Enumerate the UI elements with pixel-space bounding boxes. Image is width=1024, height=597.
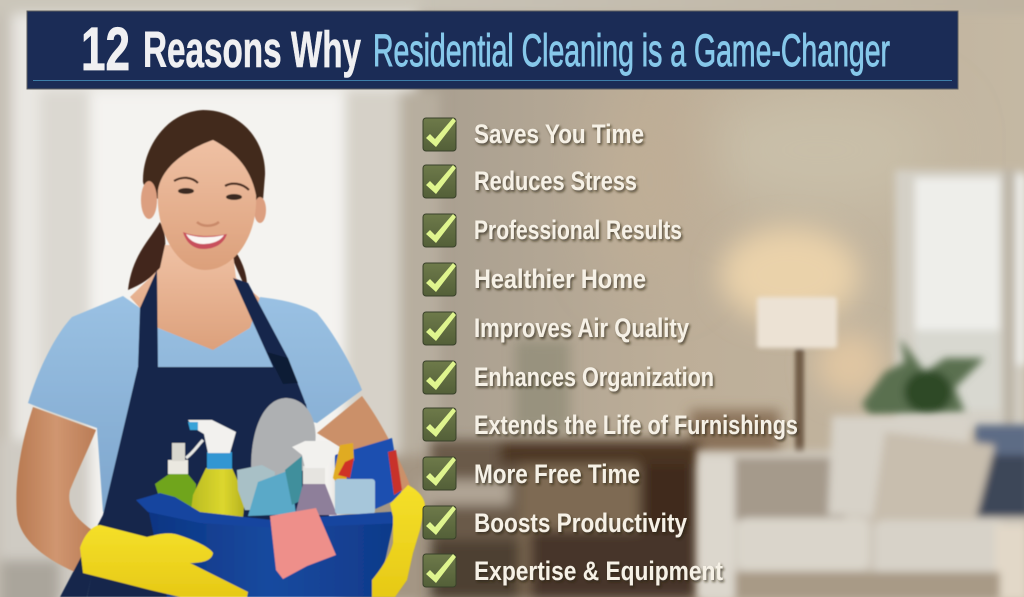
- smile: [183, 232, 227, 249]
- item: Expertise & Equipment: Expertise & Equipment: [474, 556, 723, 586]
- duster: [251, 398, 316, 480]
- item: Boosts Productivity: [423, 506, 687, 539]
- pink cloth: [270, 508, 336, 579]
- item: Reduces Stress: [423, 165, 637, 198]
- item: Improves Air Quality: [423, 312, 689, 345]
- purple spray bottle: [292, 441, 339, 515]
- arms: [16, 407, 96, 575]
- ponytail: [128, 222, 247, 290]
- sofa: [697, 416, 1024, 597]
- green bottle: [155, 443, 196, 512]
- item: Saves You Time: Saves You Time: [474, 119, 644, 149]
- ears: [141, 181, 266, 223]
- nose: [197, 222, 219, 226]
- item: Expertise & Equipment: [423, 554, 723, 587]
- lamp: [757, 297, 837, 454]
- blue caddy box: [335, 438, 402, 509]
- wall glow and top strip: [0, 0, 1024, 397]
- window: [895, 170, 1024, 430]
- plant: [862, 338, 985, 416]
- curtains and left room: [0, 0, 440, 597]
- item: More Free Time: More Free Time: [474, 459, 640, 489]
- item: Improves Air Quality: Improves Air Quality: [474, 313, 689, 343]
- item: Healthier Home: [423, 263, 646, 296]
- face: [158, 140, 256, 270]
- eyes and brows: [174, 178, 249, 200]
- woman holding cleaning bucket: [16, 110, 425, 597]
- item: Enhances Organization: [423, 361, 714, 394]
- item: Reduces Stress: Reduces Stress: [474, 166, 637, 196]
- hair: [143, 110, 265, 200]
- blue bucket: [136, 493, 405, 597]
- neck and chest: [130, 245, 262, 351]
- left yellow glove: [80, 525, 248, 597]
- item: Extends the Life of Furnishings: [423, 408, 798, 441]
- item: Professional Results: Professional Results: [474, 215, 682, 245]
- title text: white part: 12: [81, 15, 130, 83]
- dark furniture, table: [420, 340, 780, 597]
- cleaning supplies: [155, 398, 402, 518]
- title banner: [27, 11, 958, 89]
- checklist: [423, 118, 798, 587]
- right yellow glove: [372, 485, 425, 597]
- pale blue sponge: [335, 479, 375, 514]
- blue t-shirt: [28, 296, 362, 512]
- item: Enhances Organization: Enhances Organization: [474, 362, 714, 392]
- item: Saves You Time: [423, 118, 644, 151]
- sponges: [237, 465, 275, 510]
- item: Healthier Home: Healthier Home: [474, 264, 646, 294]
- item: More Free Time: [423, 457, 640, 490]
- apron: [60, 270, 320, 597]
- colored brush: [333, 443, 354, 490]
- apron strap buckle: [267, 352, 298, 384]
- item: Extends the Life of Furnishings: Extends the Life of Furnishings: [474, 410, 798, 440]
- yellow spray bottle: [186, 420, 245, 518]
- item: Boosts Productivity: Boosts Productivity: [474, 508, 687, 538]
- title text: white part: [81, 15, 361, 83]
- item: Professional Results: [423, 214, 682, 247]
- title text: white part: Reasons Why: [143, 21, 361, 78]
